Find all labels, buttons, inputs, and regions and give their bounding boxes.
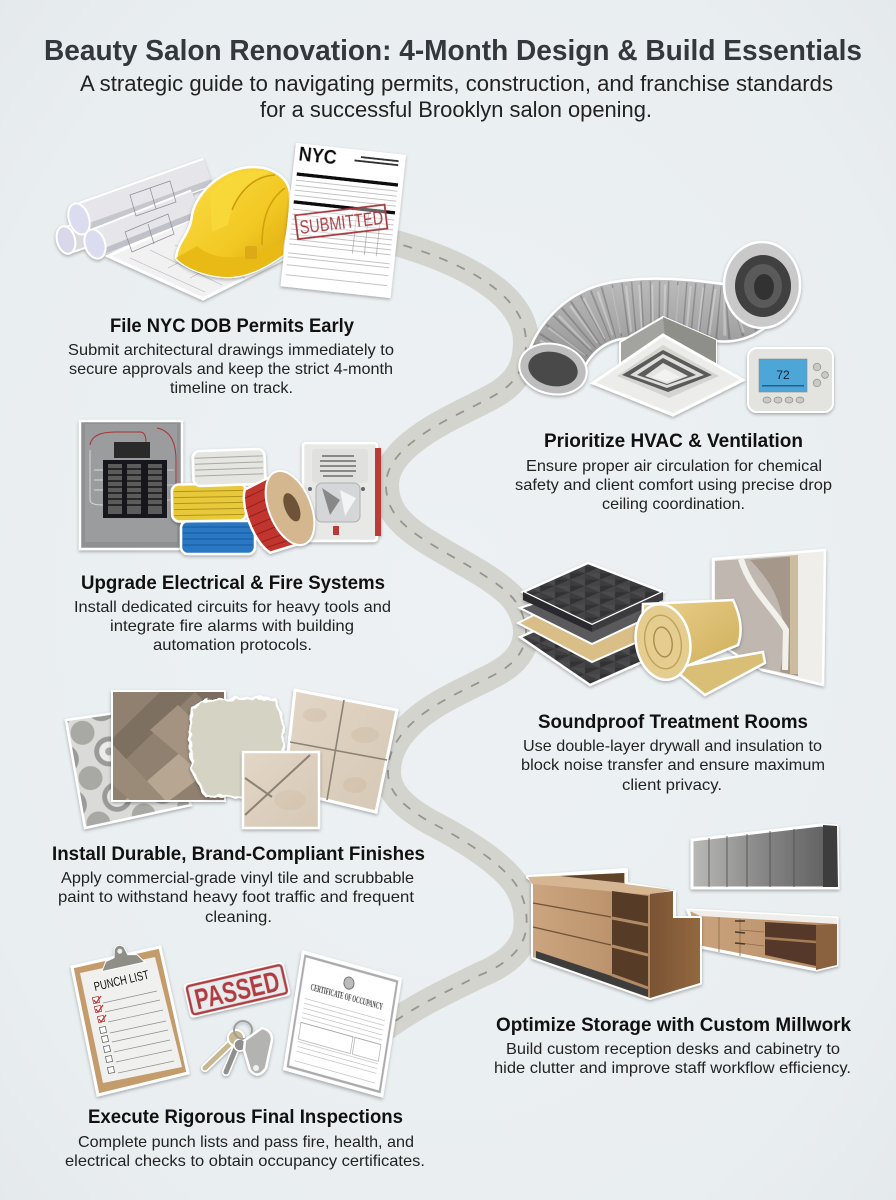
panel: electrical [74, 421, 391, 654]
icon: flexible duct [515, 242, 800, 401]
icon: punch list clipboard: PUNCH LIST [93, 968, 150, 994]
body text: integrate fire alarms with building [110, 618, 354, 635]
body text: secure approvals and keep the strict 4-month [69, 361, 393, 378]
panel: HVAC [515, 242, 833, 513]
body text: automation protocols. [153, 637, 312, 654]
body text [65, 1134, 425, 1170]
body text: hide clutter and improve staff workflow efficiency. [494, 1060, 851, 1077]
icon: wall cabinets [692, 825, 838, 888]
icon: ceiling diffuser [593, 317, 743, 415]
icon: reception desk [528, 870, 700, 998]
icon: acoustic foam stack [518, 563, 663, 685]
icon: parquet vinyl tile [111, 690, 226, 802]
body text [74, 599, 391, 654]
icon: drywall sheet [713, 550, 825, 685]
subtitle: A strategic guide to navigating permits, construction, and franchise standards [80, 71, 833, 96]
body text: paint to withstand heavy foot traffic and frequent [58, 889, 415, 906]
icon: NYC permit form with submitted stamp [280, 143, 406, 298]
body text: electrical checks to obtain occupancy certificates. [65, 1153, 425, 1170]
heading: Upgrade Electrical & Fire Systems [81, 573, 385, 594]
icon: wire spools [172, 449, 324, 560]
body text [494, 1041, 851, 1077]
icon: patterned cement tile [66, 708, 191, 828]
icon: yellow hard hat [176, 167, 290, 277]
icon: insulation roll [630, 600, 765, 695]
body text: Build custom reception desks and cabinetry to [506, 1041, 840, 1058]
body text [521, 738, 825, 794]
body text: Install dedicated circuits for heavy tools and [74, 599, 391, 616]
body text: client privacy. [622, 777, 722, 794]
title: Beauty Salon Renovation: 4-Month Design & Build Essentials [44, 35, 862, 67]
icon: NYC permit form with submitted stamp: SUBMITTED [299, 208, 384, 239]
heading: Install Durable, Brand-Compliant Finishes [52, 844, 425, 865]
subtitle: for a successful Brooklyn salon opening. [260, 97, 652, 122]
icon: breaker panel [80, 421, 182, 549]
icon: paint swatch [190, 698, 283, 798]
subtitle [80, 71, 833, 122]
panel: soundproofing [518, 550, 825, 794]
icon: keys [205, 1021, 272, 1075]
panel: inspections [65, 941, 425, 1170]
heading: Optimize Storage with Custom Millwork [496, 1015, 851, 1036]
body text [58, 870, 415, 926]
body text: Use double-layer drywall and insulation to [523, 738, 822, 755]
body text [515, 458, 832, 513]
body text: cleaning. [205, 909, 272, 926]
winding road timeline [385, 240, 527, 1028]
icon: thermostat: 72 [776, 368, 790, 382]
body text: Complete punch lists and pass fire, health, and [78, 1134, 414, 1151]
icon: stone tile corner [243, 752, 319, 828]
icon: punch list clipboard [72, 941, 188, 1095]
heading: Execute Rigorous Final Inspections [88, 1107, 403, 1128]
body text: ceiling coordination. [602, 496, 745, 513]
body text: Submit architectural drawings immediately to [68, 342, 394, 359]
panel: file permits [54, 143, 406, 397]
icon: credenza cabinet [688, 910, 837, 970]
icon: fire alarm strobe [303, 443, 381, 541]
body text: Ensure proper air circulation for chemical [526, 458, 822, 475]
icon: blueprints [54, 172, 285, 299]
icon: certificate of occupancy [283, 950, 402, 1098]
icon: NYC permit form with submitted stamp: NYC [298, 143, 338, 169]
body text: block noise transfer and ensure maximum [521, 757, 825, 774]
heading: Prioritize HVAC & Ventilation [544, 431, 803, 452]
panel: finishes [52, 690, 425, 926]
body text: Apply commercial-grade vinyl tile and scrubbable [61, 870, 414, 887]
icon: passed stamp: PASSED [192, 966, 283, 1016]
body text: timeline on track. [170, 380, 293, 397]
heading: File NYC DOB Permits Early [110, 316, 354, 337]
body text [68, 342, 394, 397]
icon: beige floor tile [284, 690, 397, 812]
panel: millwork [494, 825, 851, 1077]
heading: Soundproof Treatment Rooms [538, 712, 808, 733]
body text: safety and client comfort using precise drop [515, 477, 832, 494]
icon: thermostat [748, 348, 833, 412]
icon: certificate of occupancy: CERTIFICATE OF OCCUPANCY [310, 981, 384, 1012]
